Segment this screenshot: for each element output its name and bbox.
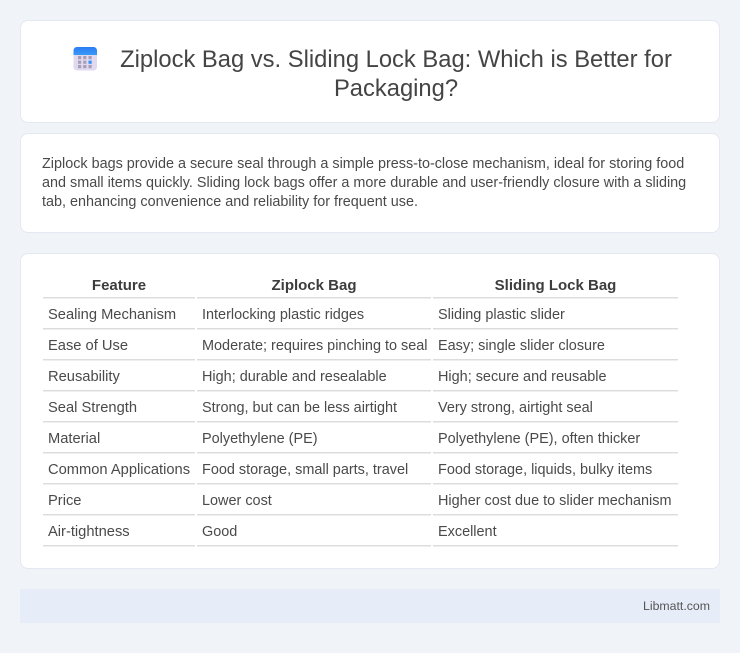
table header: Ziplock Bag: [271, 277, 356, 294]
row: Sealing Mechanism: Sealing Mechanism: [48, 307, 176, 323]
row: Common Applications: Food storage, small parts, travel: [202, 462, 408, 478]
row: Reusability: Reusability: [48, 369, 120, 385]
row: Price: Price: [48, 493, 81, 509]
row: Air-tightness: Air-tightness: [48, 524, 130, 540]
row: Common Applications: [48, 462, 652, 478]
footer source text: Libmatt.com: [643, 599, 710, 613]
row: Reusability: High; durable and resealable: [202, 369, 387, 385]
row: Ease of Use: Moderate; requires pinching to seal: [202, 338, 428, 354]
row: Common Applications: Common Applications: [48, 462, 190, 478]
row: Air-tightness: Good: [202, 524, 237, 540]
intro paragraph: and small items quickly. Sliding lock bags offer a more durable and user-friendly closure with a sliding: [42, 175, 686, 191]
panel: title card: [20, 20, 720, 123]
panel: comparison table card: [20, 253, 720, 569]
row: Ease of Use: Easy; single slider closure: [438, 338, 605, 354]
row: Material: [48, 431, 640, 447]
row: Reusability: [48, 369, 607, 385]
row: Reusability: High; secure and reusable: [438, 369, 607, 385]
row: Material: Material: [48, 431, 100, 447]
panel: intro text card: [20, 133, 720, 233]
intro paragraph: tab, enhancing convenience and reliability for frequent use.: [42, 194, 418, 210]
row: Material: Polyethylene (PE): [202, 431, 318, 447]
row: Material: Polyethylene (PE), often thicker: [438, 431, 640, 447]
table header: Feature: [92, 277, 146, 294]
row: Ease of Use: Ease of Use: [48, 338, 128, 354]
row: Seal Strength: Seal Strength: [48, 400, 137, 416]
row: Seal Strength: [48, 400, 593, 416]
row: Seal Strength: Very strong, airtight seal: [438, 400, 593, 416]
row: Common Applications: Food storage, liquids, bulky items: [438, 462, 652, 478]
table header: [92, 277, 616, 294]
row: Sealing Mechanism: Interlocking plastic ridges: [202, 307, 364, 323]
row: Air-tightness: Excellent: [438, 524, 497, 540]
row: Seal Strength: Strong, but can be less airtight: [202, 400, 397, 416]
comparison table: [43, 277, 678, 547]
table header: Sliding Lock Bag: [495, 277, 616, 294]
intro paragraph: Ziplock bags provide a secure seal through a simple press-to-close mechanism, ideal for storing food: [42, 156, 684, 172]
title: Ziplock Bag vs. Sliding Lock Bag: Which is Better for Packaging?: [120, 46, 672, 102]
row: Ease of Use: [48, 338, 605, 354]
footer bar: [20, 589, 720, 623]
row: Sealing Mechanism: [48, 307, 565, 323]
row: Price: Lower cost: [202, 493, 272, 509]
intro paragraph: [42, 156, 686, 210]
row: Price: Higher cost due to slider mechanism: [438, 493, 672, 509]
row: Sealing Mechanism: Sliding plastic slider: [438, 307, 565, 323]
row: Price: [48, 493, 672, 509]
row: Air-tightness: [48, 524, 497, 540]
icon: calendar: [74, 47, 97, 70]
